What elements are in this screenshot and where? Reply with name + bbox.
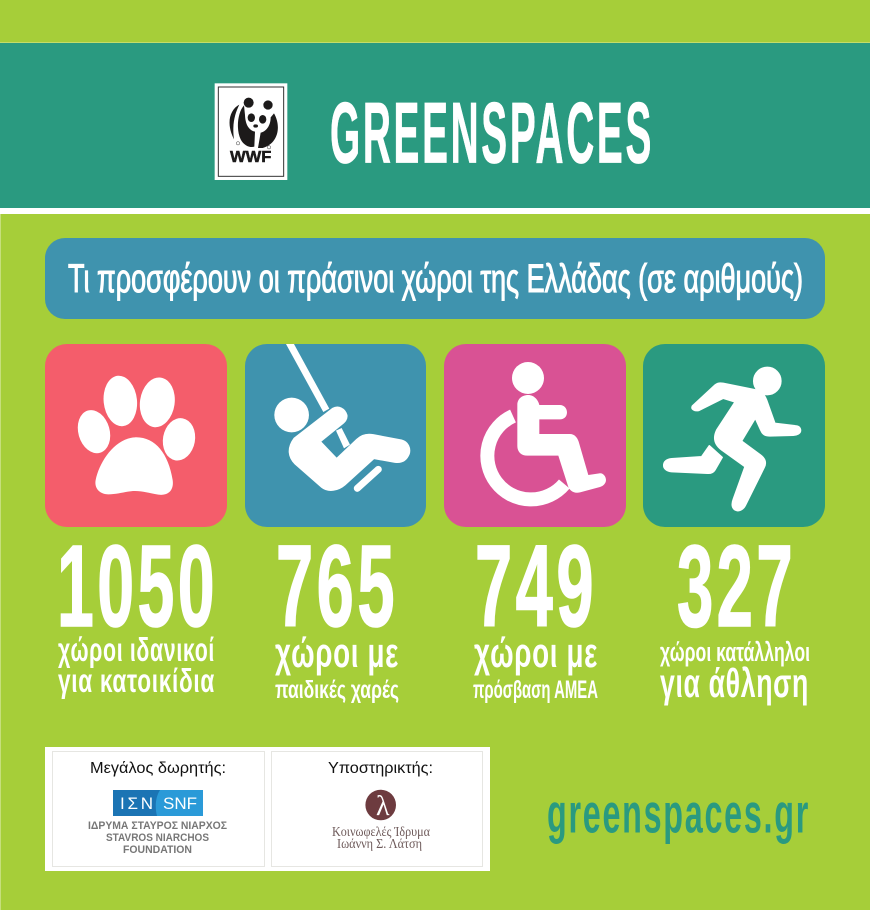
sponsor: major donor SNF: ΙΣΝ xyxy=(120,794,153,813)
stat: 765 playgrounds: χώροι με xyxy=(275,629,399,676)
sponsor: major donor SNF: Μεγάλος δωρητής: xyxy=(90,760,226,777)
stat: 749 accessibility: 749 xyxy=(475,521,597,651)
logo: WWF panda xyxy=(215,83,287,180)
sponsor: Latsis foundation xyxy=(272,752,482,866)
stat: 1050 pets xyxy=(57,521,218,699)
sponsor: Latsis foundation: Υποστηρικτής: xyxy=(328,760,433,777)
stat: 765 playgrounds: παιδικές χαρές xyxy=(275,676,399,704)
sponsor: major donor SNF: SNF xyxy=(163,794,197,813)
icon: child on swing, blue card xyxy=(245,344,426,527)
icon: wheelchair, pink card xyxy=(444,344,626,527)
stat: 765 playgrounds xyxy=(275,521,399,704)
sponsors panel xyxy=(45,747,490,871)
stat: 765 playgrounds: 765 xyxy=(276,521,398,651)
stat: 327 sports xyxy=(660,521,810,706)
stat: 1050 pets: χώροι ιδανικοί xyxy=(58,631,215,668)
sponsor: major donor SNF: STAVROS NIARCHOS xyxy=(106,832,209,844)
stat: 749 accessibility xyxy=(473,521,598,704)
icon: paw on red card xyxy=(45,344,227,527)
sponsor: major donor SNF: ΙΔΡΥΜΑ ΣΤΑΥΡΟΣ ΝΙΑΡΧΟΣ xyxy=(88,820,227,832)
logo: WWF panda: WWF xyxy=(230,149,272,166)
stat: 1050 pets: για κατοικίδια xyxy=(58,662,215,699)
heading pill xyxy=(45,238,825,319)
sponsor: Latsis foundation: Ιωάννη Σ. Λάτση xyxy=(337,836,422,851)
stat: 749 accessibility: πρόσβαση ΑΜΕΑ xyxy=(473,676,598,704)
sponsor: major donor SNF: FOUNDATION xyxy=(123,844,192,856)
sponsor: Latsis foundation: λ xyxy=(376,791,390,822)
sponsor: Latsis foundation: Κοινωφελές Ίδρυμα xyxy=(332,824,430,839)
stat: 749 accessibility: χώροι με xyxy=(474,629,598,676)
stat: 1050 pets: 1050 xyxy=(57,521,218,651)
icon: runner, teal card xyxy=(643,344,825,527)
sponsor: major donor SNF xyxy=(52,752,264,866)
